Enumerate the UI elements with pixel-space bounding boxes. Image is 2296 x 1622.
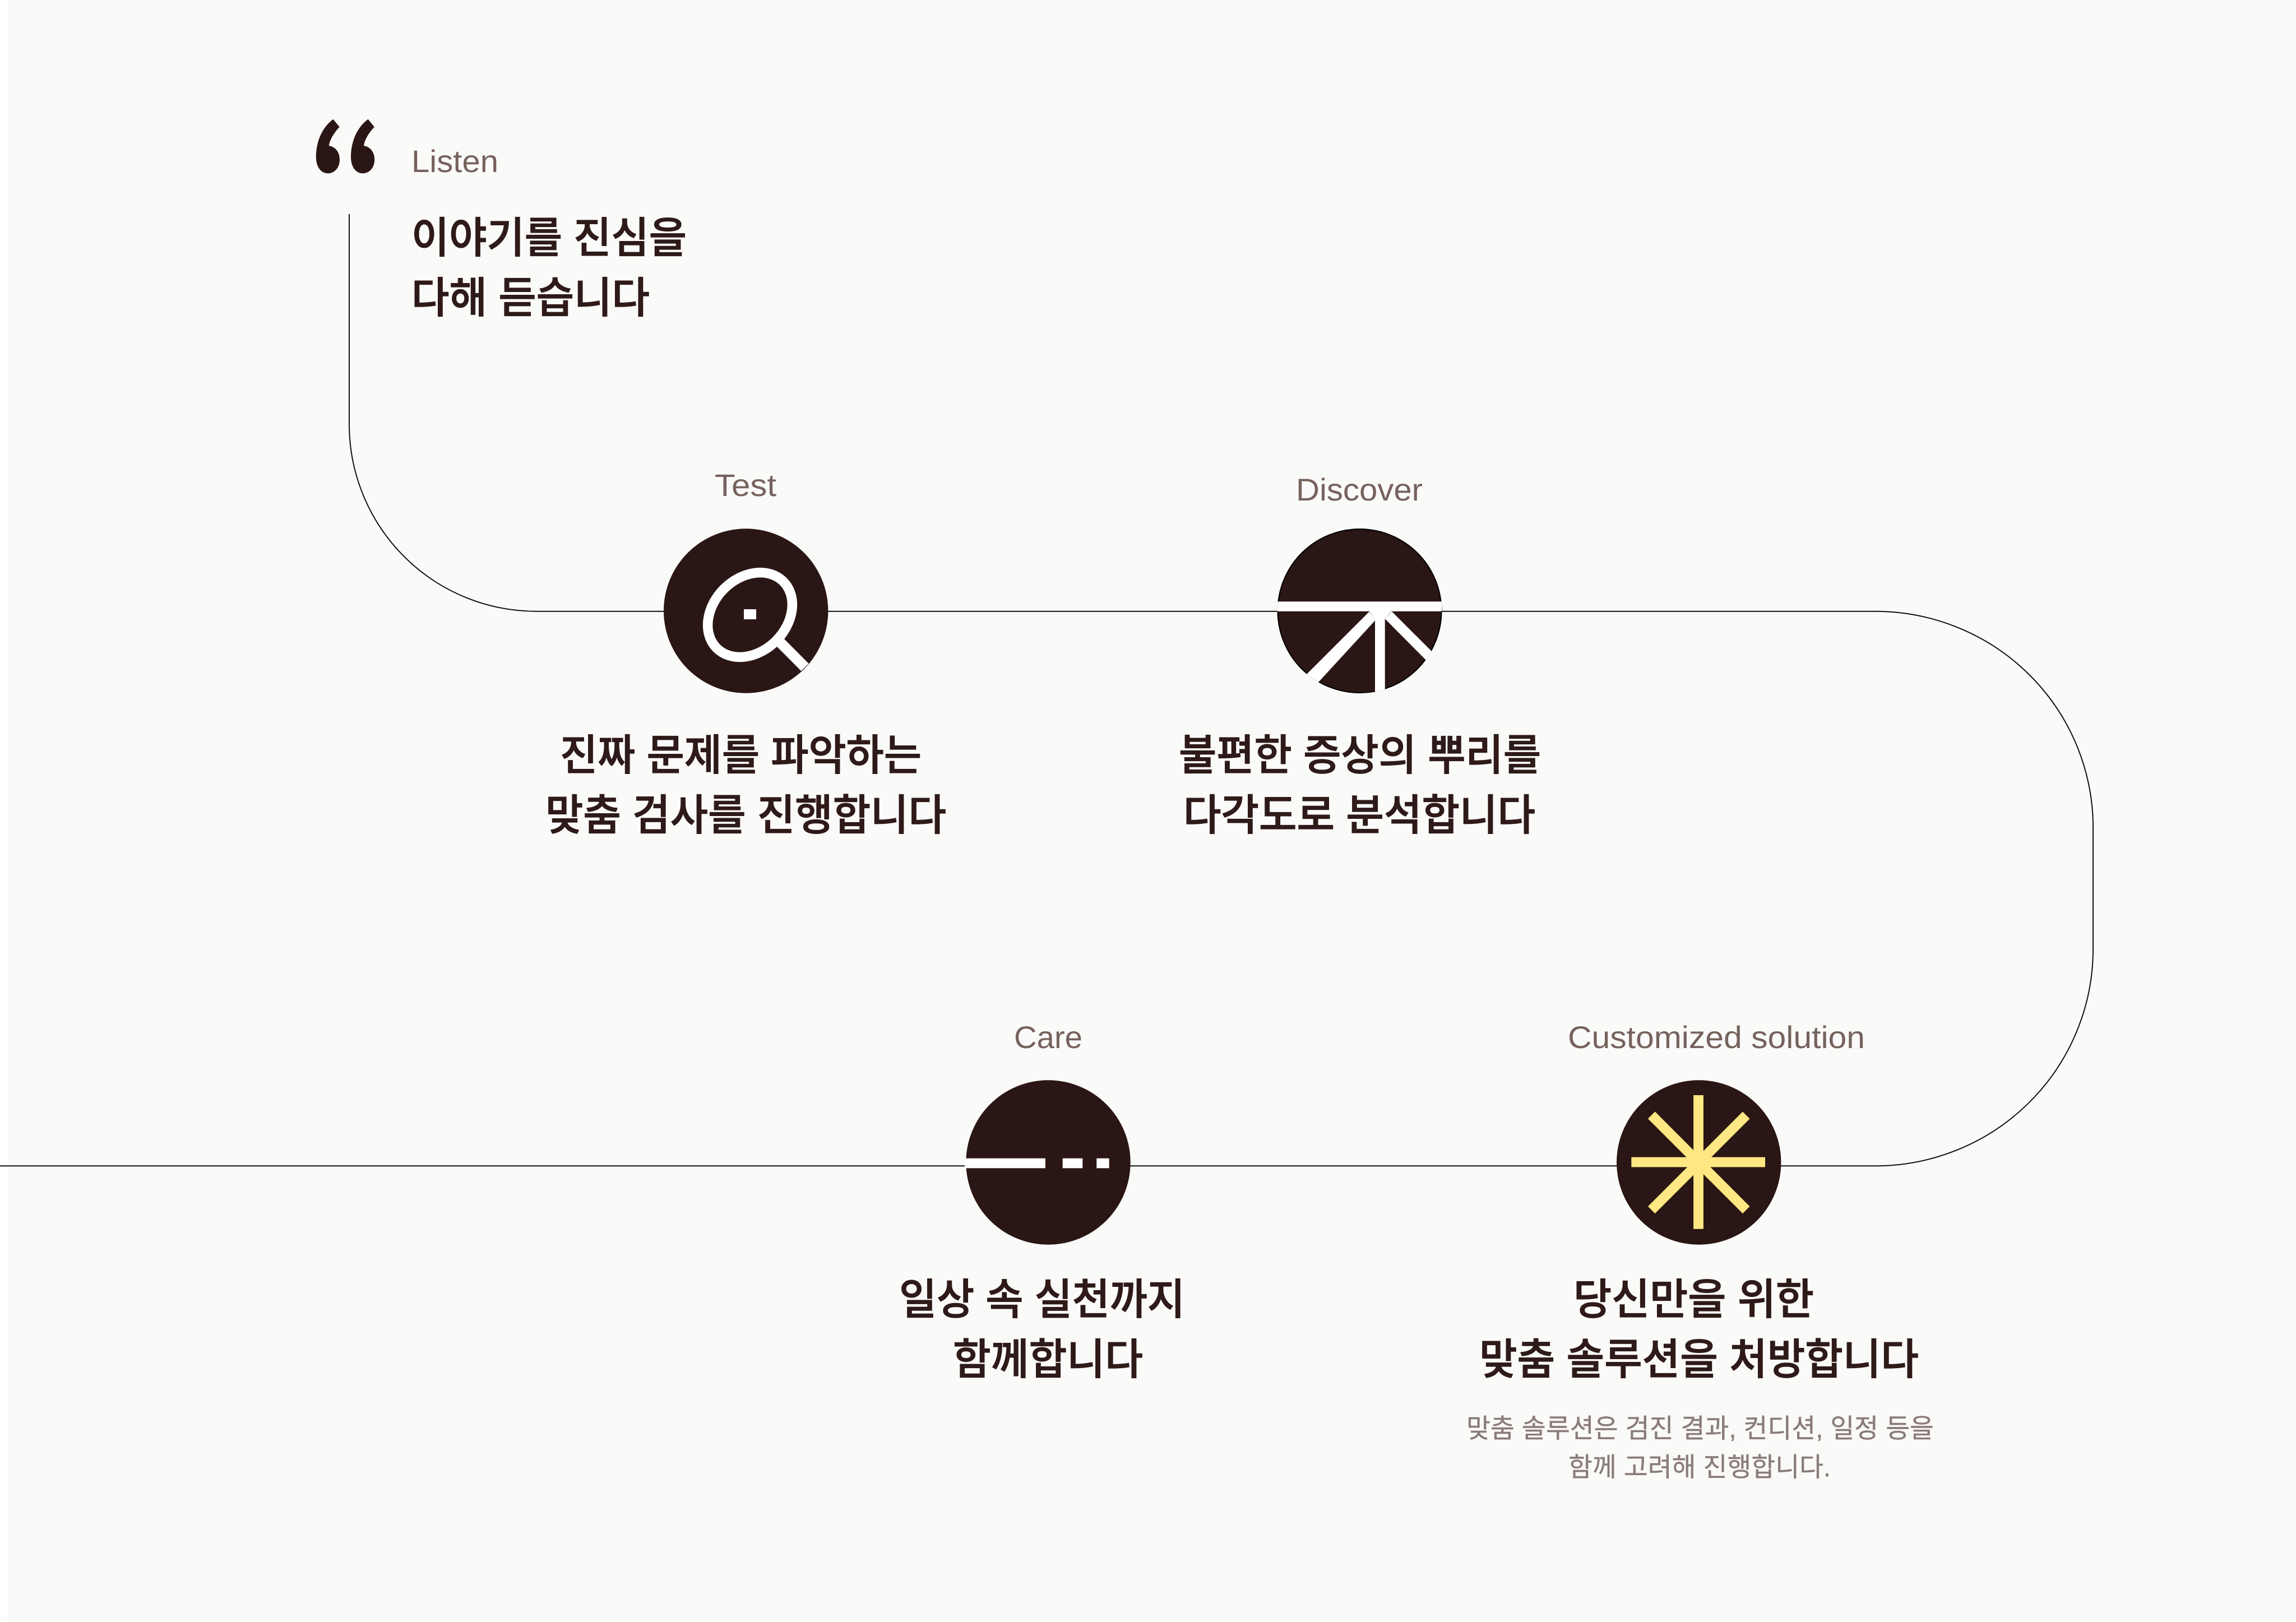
- label: Test: Test: [715, 467, 776, 503]
- icon: quotation mark: [316, 119, 374, 173]
- heading: Discover: 다각도로 분석합니다: [1183, 792, 1535, 840]
- heading: Listen: 이야기를 진심을: [411, 215, 687, 262]
- step: Discover: [1179, 472, 1541, 840]
- step: Customized solution: [1466, 1019, 1934, 1482]
- heading: Discover: [1179, 732, 1541, 840]
- icon: yellow asterisk: [1617, 1080, 1781, 1245]
- infographic canvas: [0, 119, 2094, 1479]
- icon: magnifier: [664, 529, 828, 693]
- heading: Customized solution: 맞춤 솔루션을 처방합니다: [1479, 1336, 1919, 1384]
- note text: [1466, 1414, 1934, 1482]
- heading: Discover: 불편한 증상의 뿌리를: [1179, 732, 1541, 780]
- label: Listen: Listen: [411, 143, 498, 179]
- heading: Care: [899, 1276, 1185, 1384]
- label: Discover: Discover: [1296, 472, 1423, 507]
- label: Customized solution: Customized solution: [1568, 1019, 1865, 1055]
- heading: Test: [545, 732, 946, 840]
- icon: dash line: [965, 1080, 1131, 1245]
- icon: root lines: [1277, 529, 1442, 698]
- heading: Care: 함께합니다: [953, 1336, 1143, 1384]
- step: Test: [545, 467, 946, 840]
- heading: Listen: [411, 215, 687, 322]
- heading: Care: 일상 속 실천까지: [899, 1276, 1185, 1324]
- step: Care: [899, 1019, 1185, 1384]
- label: Care: Care: [1014, 1019, 1082, 1055]
- heading: Test: 맞춤 검사를 진행합니다: [545, 792, 946, 840]
- heading: Customized solution: [1479, 1276, 1919, 1384]
- heading: Customized solution: 당신만을 위한: [1573, 1276, 1814, 1324]
- journey path line: [0, 214, 2093, 1166]
- heading: Test: 진짜 문제를 파악하는: [560, 732, 922, 780]
- heading: Listen: 다해 듣습니다: [411, 275, 650, 322]
- step: Listen: [411, 143, 687, 322]
- note text: 맞춤 솔루션은 검진 결과, 컨디션, 일정 등을: [1466, 1414, 1934, 1443]
- note text: 함께 고려해 진행합니다.: [1568, 1452, 1831, 1482]
